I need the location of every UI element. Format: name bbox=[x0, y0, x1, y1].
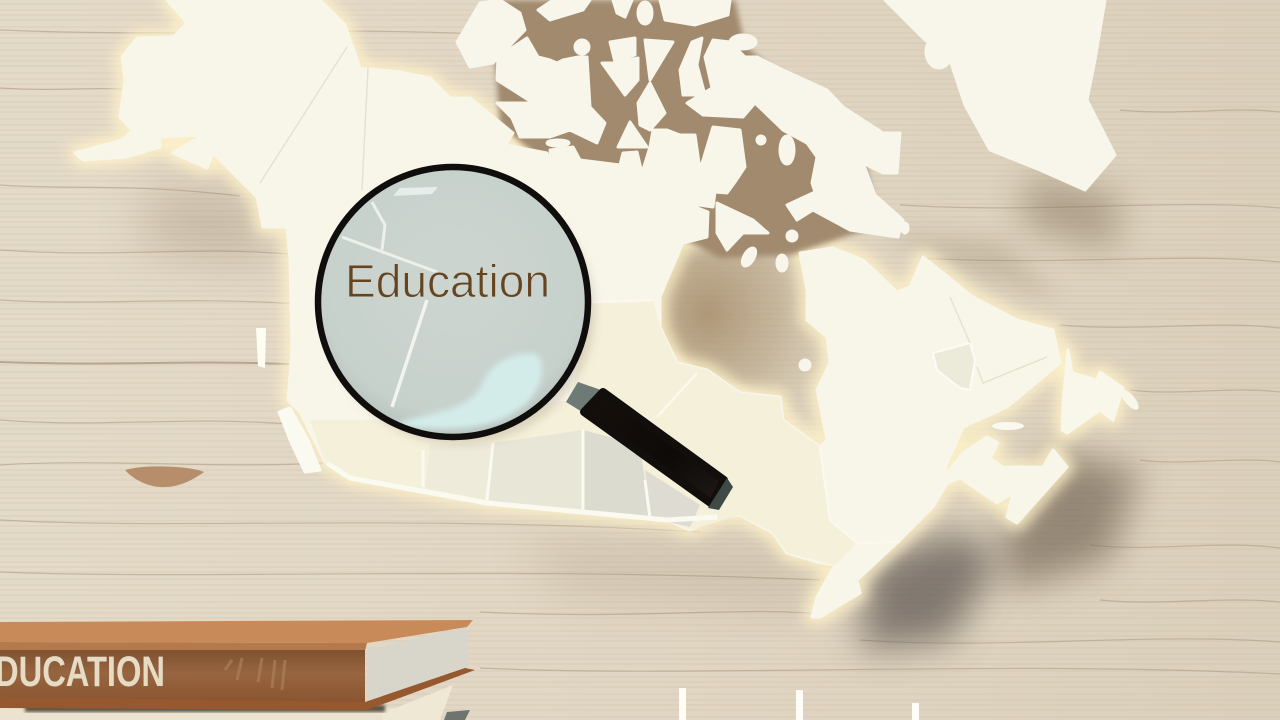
map shadows bbox=[140, 175, 1140, 650]
lens rim bbox=[318, 167, 588, 437]
arctic channels bbox=[490, 0, 880, 258]
prairie panels bbox=[425, 443, 493, 500]
Greenland bbox=[885, 0, 1115, 190]
map glow bbox=[75, 0, 1123, 617]
inland lake region of Quebec bbox=[933, 343, 975, 390]
Newfoundland bbox=[1062, 350, 1123, 433]
map of Canada bbox=[75, 0, 1142, 617]
magnifying glass bbox=[318, 167, 733, 510]
stack of books bbox=[0, 620, 475, 720]
lens label: Education bbox=[345, 255, 550, 307]
lower book bbox=[0, 685, 470, 720]
lens shadow bbox=[326, 180, 594, 444]
Arctic islands bbox=[457, 0, 908, 370]
handle bbox=[566, 382, 733, 510]
top book cover bbox=[0, 620, 473, 643]
mainland bbox=[75, 0, 1067, 617]
lens bbox=[319, 168, 587, 436]
province borders bbox=[260, 47, 1047, 543]
spine title: DUCATION bbox=[0, 648, 165, 696]
Prince Edward Island bbox=[992, 422, 1024, 430]
wood knot bbox=[125, 466, 204, 487]
white bars at bottom edge bbox=[679, 688, 919, 720]
book shadow bbox=[25, 705, 385, 712]
spine ornament bbox=[225, 658, 285, 690]
top book pages bbox=[367, 627, 468, 702]
cream central and eastern provinces bbox=[310, 300, 857, 565]
Vancouver island and coast bbox=[279, 408, 320, 472]
